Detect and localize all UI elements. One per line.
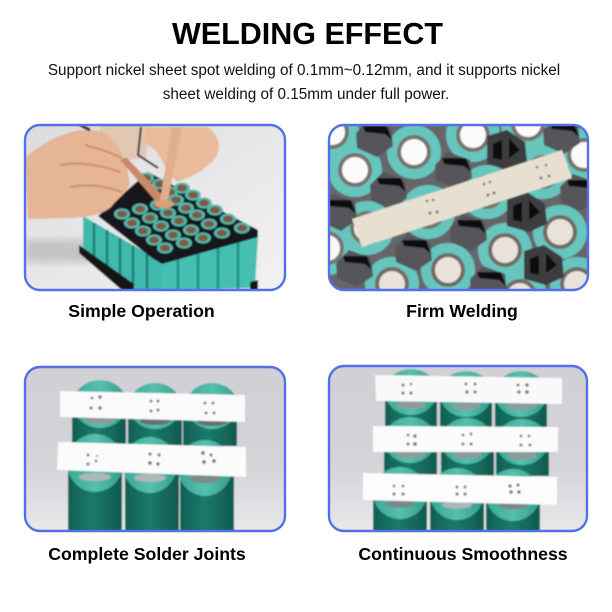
table shadow — [25, 240, 92, 262]
label: continuous smoothness: Continuous Smoothness — [358, 544, 568, 564]
subtitle text — [48, 62, 560, 103]
right hand — [144, 127, 219, 182]
battery pack top — [98, 172, 258, 264]
weld spots — [86, 395, 216, 466]
middle row of cells — [384, 417, 549, 476]
weld spots — [426, 164, 550, 214]
wrist — [100, 125, 150, 160]
battery cells — [330, 126, 587, 289]
label: complete solder joints: Complete Solder Joints — [48, 544, 246, 564]
battery pack sides — [79, 216, 258, 292]
label: simple operation: Simple Operation — [68, 301, 215, 321]
front row of cells — [67, 434, 234, 533]
icon: wristband cord — [138, 127, 158, 168]
panel: simple operation photo — [25, 125, 285, 292]
back row of cells — [72, 380, 238, 446]
panel: continuous smoothness photo — [329, 366, 587, 533]
bottom row of cells — [373, 467, 540, 533]
black holder connectors — [330, 126, 587, 289]
top row of cells — [385, 369, 547, 427]
subtitle text: sheet welding of 0.15mm under full power. — [163, 86, 449, 103]
label: firm welding: Firm Welding — [406, 301, 518, 321]
weld spots — [392, 382, 532, 496]
subtitle text: Support nickel sheet spot welding of 0.1mm~0.12mm, and it supports nickel — [48, 62, 560, 79]
nickel strips — [60, 391, 245, 422]
panel: complete solder joints photo — [25, 367, 285, 533]
left hand — [25, 130, 130, 219]
nickel strip — [352, 150, 572, 247]
welding pens — [120, 156, 162, 202]
title: WELDING EFFECT — [172, 17, 443, 51]
nickel strips — [375, 375, 562, 404]
panel: firm welding photo — [328, 124, 590, 292]
